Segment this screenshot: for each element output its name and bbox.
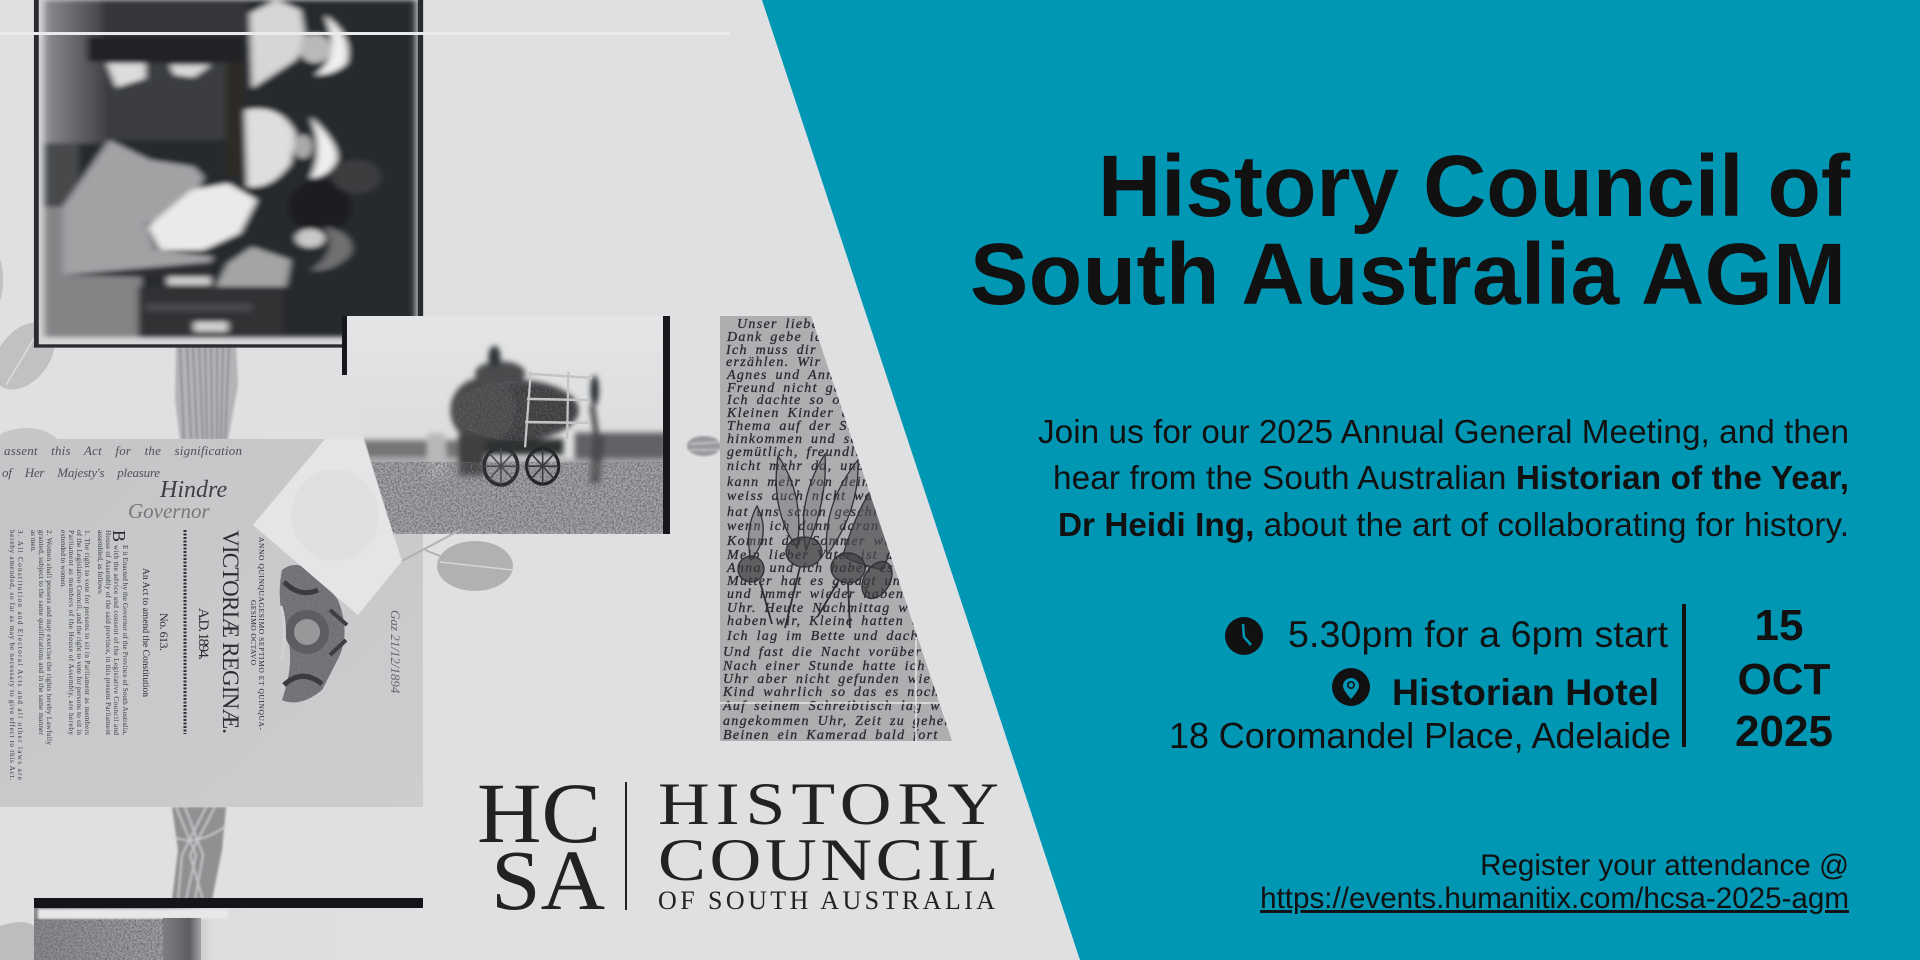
handwriting on document xyxy=(2,446,242,518)
handwriting lines: Freund nicht gesehen und xyxy=(726,381,912,396)
event time: 5.30pm for a 6pm start xyxy=(1288,613,1669,655)
handwriting lines: angekommen Uhr, Zeit zu gehen xyxy=(723,714,953,729)
leaf: upper left xyxy=(0,258,67,472)
logo monogram: SA xyxy=(491,832,605,928)
logo monogram: HC xyxy=(477,765,601,861)
handwriting lines: Dank gebe ich dir für xyxy=(726,330,887,345)
registration call to action: Register your attendance @ xyxy=(1480,849,1849,882)
act body text: assembled, as follows: xyxy=(96,530,104,595)
intro text block: Dr Heidi Ing, about the art of collaborating for history. xyxy=(1058,507,1849,544)
act body text: E it Enacted by the Governor of the Province of South Australia, xyxy=(121,545,129,735)
registration call to action xyxy=(1260,849,1849,915)
handwriting lines: Unser liebes Kind xyxy=(737,317,866,332)
handwriting on document: of Her Majesty's pleasure xyxy=(2,465,160,480)
handwriting lines: haben wir, Kleine hatten und xyxy=(727,614,937,629)
act body text: 3. All Constitution and Electoral Acts and all other laws are xyxy=(16,530,24,780)
venue address: 18 Coromandel Place, Adelaide xyxy=(1169,715,1671,756)
handwriting lines: hat uns schon geschrieben und xyxy=(727,505,949,520)
logo: History Council of South Australia xyxy=(477,765,1005,928)
handwriting lines: Ich dachte so oft an dich xyxy=(726,393,913,408)
handwriting lines: gemütlich, freundlich ist ja xyxy=(727,445,923,460)
handwriting lines: Thema auf der Straße hier xyxy=(727,419,919,434)
handwriting lines: erzählen. Wir haben viel xyxy=(726,355,903,370)
handwriting lines: Nach einer Stunde hatte ich das xyxy=(722,659,957,674)
white construction lines xyxy=(720,637,952,741)
handwriting on document: Governor xyxy=(128,499,210,523)
photo: seated women (rotated archival photograph) xyxy=(34,0,423,348)
handwriting lines: Agnes und Anna sind hier xyxy=(726,368,915,383)
leaf and stem beside note xyxy=(402,530,513,591)
logo wordmark: OF SOUTH AUSTRALIA xyxy=(658,886,995,915)
intro text block: Join us for our 2025 Annual General Meeting, and then xyxy=(1038,414,1849,451)
title column: GESIMO OCTAVO xyxy=(249,600,258,666)
crest xyxy=(280,565,347,702)
act body text xyxy=(8,530,129,780)
handwriting lines: Kleinen Kinder auf dem Hof xyxy=(726,406,932,421)
date: 2025 xyxy=(1735,707,1833,756)
photo black edges xyxy=(663,316,670,534)
handwriting lines: weiss auch nicht was er so xyxy=(727,489,925,504)
handwriting lines: hinkommen und sehen wie es xyxy=(727,432,935,447)
rope: lower section xyxy=(172,807,226,900)
rope: upper section xyxy=(175,345,238,440)
act body text: Parliament as members of the House of Assembly, are hereby xyxy=(67,530,75,735)
hay texture xyxy=(453,381,577,441)
handwriting lines: Mutter hat es gesagt und wir alle xyxy=(726,574,974,589)
icon: clock xyxy=(1225,617,1263,655)
photo strip: bottom film negative xyxy=(34,898,423,960)
act body text: 2. Women shall possess and may exercise the rights hereby Lawfully xyxy=(45,530,53,745)
handwriting lines: kann mehr von deinem Brief xyxy=(727,475,932,490)
handwriting lines: Kommt der Sommer wieder zu uns xyxy=(726,534,974,549)
handwriting lines: Ich lag im Bette und dachte nur xyxy=(726,629,963,644)
thin white rule across top xyxy=(0,32,730,35)
intro text block: hear from the South Australian Historian of the Year, xyxy=(1053,460,1849,497)
handwriting lines: Ich muss dir nun etwas xyxy=(725,343,896,358)
logo divider xyxy=(625,782,627,910)
act body text: with the advice and consent of the Legislative Council and xyxy=(112,545,120,735)
act body text: hereby amended, so far as may be necessary to give effect to this Act. xyxy=(8,530,16,780)
act body text: of the Legislative Council, and the right to vote for persons to sit in xyxy=(75,530,83,735)
logo wordmark: COUNCIL xyxy=(658,827,1002,893)
folded paper note with seal xyxy=(253,439,402,615)
handwriting lines xyxy=(722,318,946,741)
title: South Australia AGM xyxy=(970,225,1846,323)
title column: A.D. 1894. xyxy=(195,608,211,660)
registration call to action: https://events.humanitix.com/hcsa-2025-agm xyxy=(1260,882,1849,915)
date: 15 xyxy=(1755,601,1803,650)
leaf: bottom left xyxy=(0,922,34,960)
handwritten date note: Gaz 21/12/1894 xyxy=(388,610,403,694)
field texture xyxy=(347,462,663,534)
handwriting lines: wenn ich dann daran denke so xyxy=(727,519,949,534)
venue name: Historian Hotel xyxy=(1392,671,1659,713)
title column xyxy=(140,530,266,734)
handwriting lines: Auf seinem Schreibtisch lag wohl xyxy=(722,699,963,714)
handwriting lines: nicht mehr da, und auch wir xyxy=(727,459,936,474)
cart wheels xyxy=(484,448,559,485)
logo wordmark: HISTORY xyxy=(658,771,1005,837)
handwriting lines: Mein lieber Vater ist auch da xyxy=(726,548,943,563)
date xyxy=(1735,601,1833,756)
handwriting on document: assent this Act for the signification xyxy=(4,443,242,458)
title xyxy=(970,137,1851,323)
title: History Council of xyxy=(1098,137,1851,235)
act body text: House of Assembly of the said province, in this present Parliament xyxy=(104,530,112,735)
title column: ANNO QUINQUAGESIMO SEPTIMO ET QUINQUA- xyxy=(257,537,266,730)
handwriting on document: Hindre xyxy=(159,477,227,503)
date divider xyxy=(1682,604,1686,747)
act body text: 1. The right to vote for persons to sit in Parliament as members xyxy=(83,530,91,735)
title column: VICTORIÆ REGINÆ. xyxy=(218,530,243,734)
icon: location pin xyxy=(1332,668,1370,706)
document: Victoriae Reginae act xyxy=(0,439,423,807)
title column: No. 613. xyxy=(157,613,171,651)
teal panel xyxy=(762,0,1920,960)
dotted divider xyxy=(184,530,186,734)
handwriting lines: Kind wahrlich so das es noch da xyxy=(722,685,964,700)
logo wordmark xyxy=(658,771,1005,915)
handwriting lines: Uhr. Heute Nachmittag war ich xyxy=(727,601,953,616)
intro text block xyxy=(1038,414,1849,544)
handwriting lines: Und fast die Nacht vorüber war xyxy=(723,645,956,660)
act body text: as men. xyxy=(29,530,37,552)
rope: stub beside handwriting xyxy=(687,436,721,456)
photo: hay cart in field xyxy=(341,316,670,535)
handwriting lines: und immer wieder haben wir hier xyxy=(727,587,970,602)
handwriting lines: Beinen ein Kamerad bald fort xyxy=(723,728,939,743)
act body text: granted, subject to the same qualifications and in the same manner xyxy=(37,530,45,736)
title column: An Act to amend the Constitution xyxy=(140,568,150,697)
botanical sketch xyxy=(738,454,898,628)
handwriting lines: Uhr aber nicht gefunden wie die xyxy=(723,672,960,687)
date: OCT xyxy=(1738,655,1831,704)
handwritten letter with botanical sketch xyxy=(720,316,974,743)
act body text: extended to women. xyxy=(59,530,67,588)
cart frame xyxy=(525,372,592,447)
handwriting lines: Anna und ich haben es wohl so xyxy=(726,561,957,576)
logo monogram xyxy=(477,765,605,928)
act body text: B xyxy=(109,530,129,542)
